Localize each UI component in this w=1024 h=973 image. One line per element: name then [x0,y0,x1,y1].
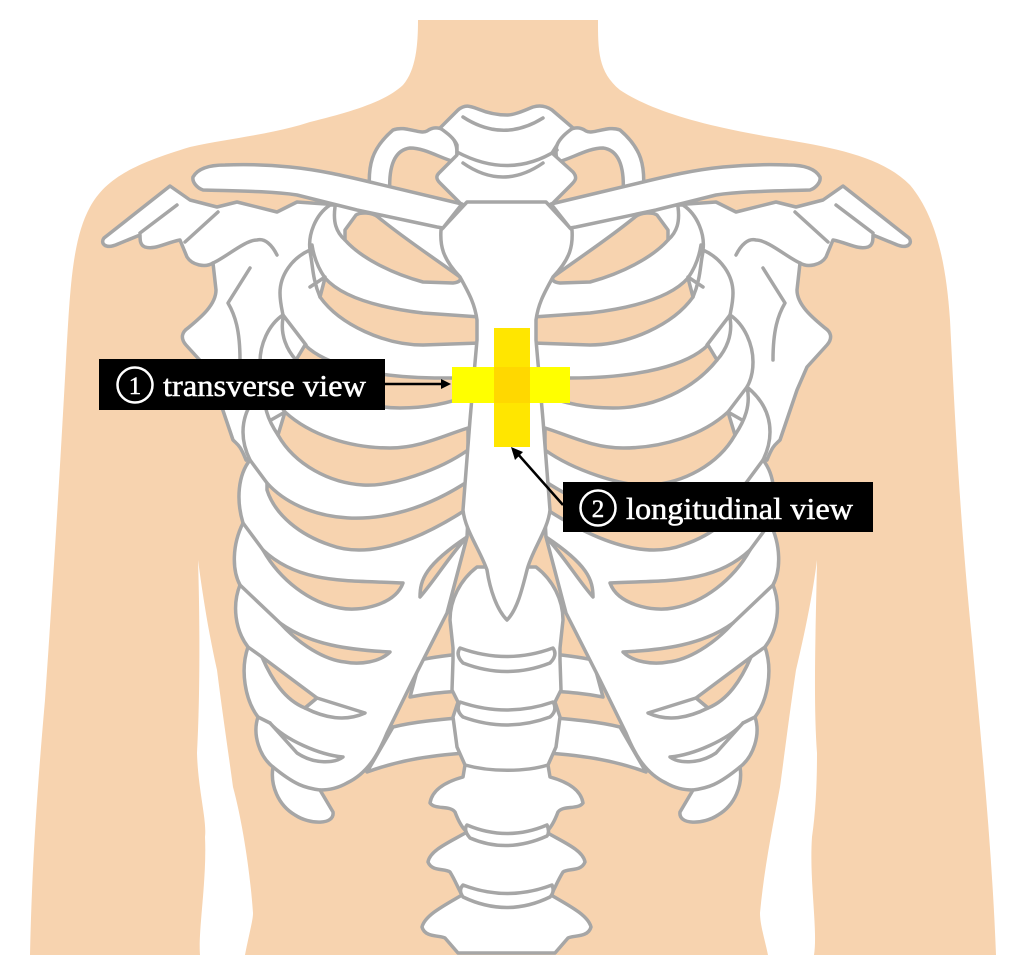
callout: longitudinal view [563,482,873,532]
lower rib bands behind the spine [367,652,646,772]
right rib cage and scapula [533,128,910,822]
clavicles [193,165,820,228]
arrow to transverse probe [385,379,451,389]
arrow to longitudinal probe [511,447,563,505]
right clavicle [551,165,820,228]
left clavicle [193,165,462,228]
intervertebral disc 4 [460,885,553,908]
intervertebral disc 1 [458,648,555,672]
left rib cage and scapula [103,128,480,822]
vertebral column outline [422,567,591,953]
callout: transverse view [99,359,385,410]
callout: transverse view: 1 [129,373,141,400]
yellow probe placement cross [452,328,570,447]
upper thoracic vertebrae [437,106,576,206]
intervertebral disc 3 [466,825,548,846]
callout: longitudinal view: longitudinal view [626,491,854,526]
spine [422,567,591,953]
transverse probe [452,367,570,403]
longitudinal probe [494,328,530,447]
probe overlap [494,367,530,403]
sternum [441,202,572,620]
callout: transverse view: transverse view [163,368,367,403]
intervertebral disc 2 [458,702,555,725]
vertebra divider [465,765,548,770]
callout: longitudinal view: 2 [592,496,604,523]
